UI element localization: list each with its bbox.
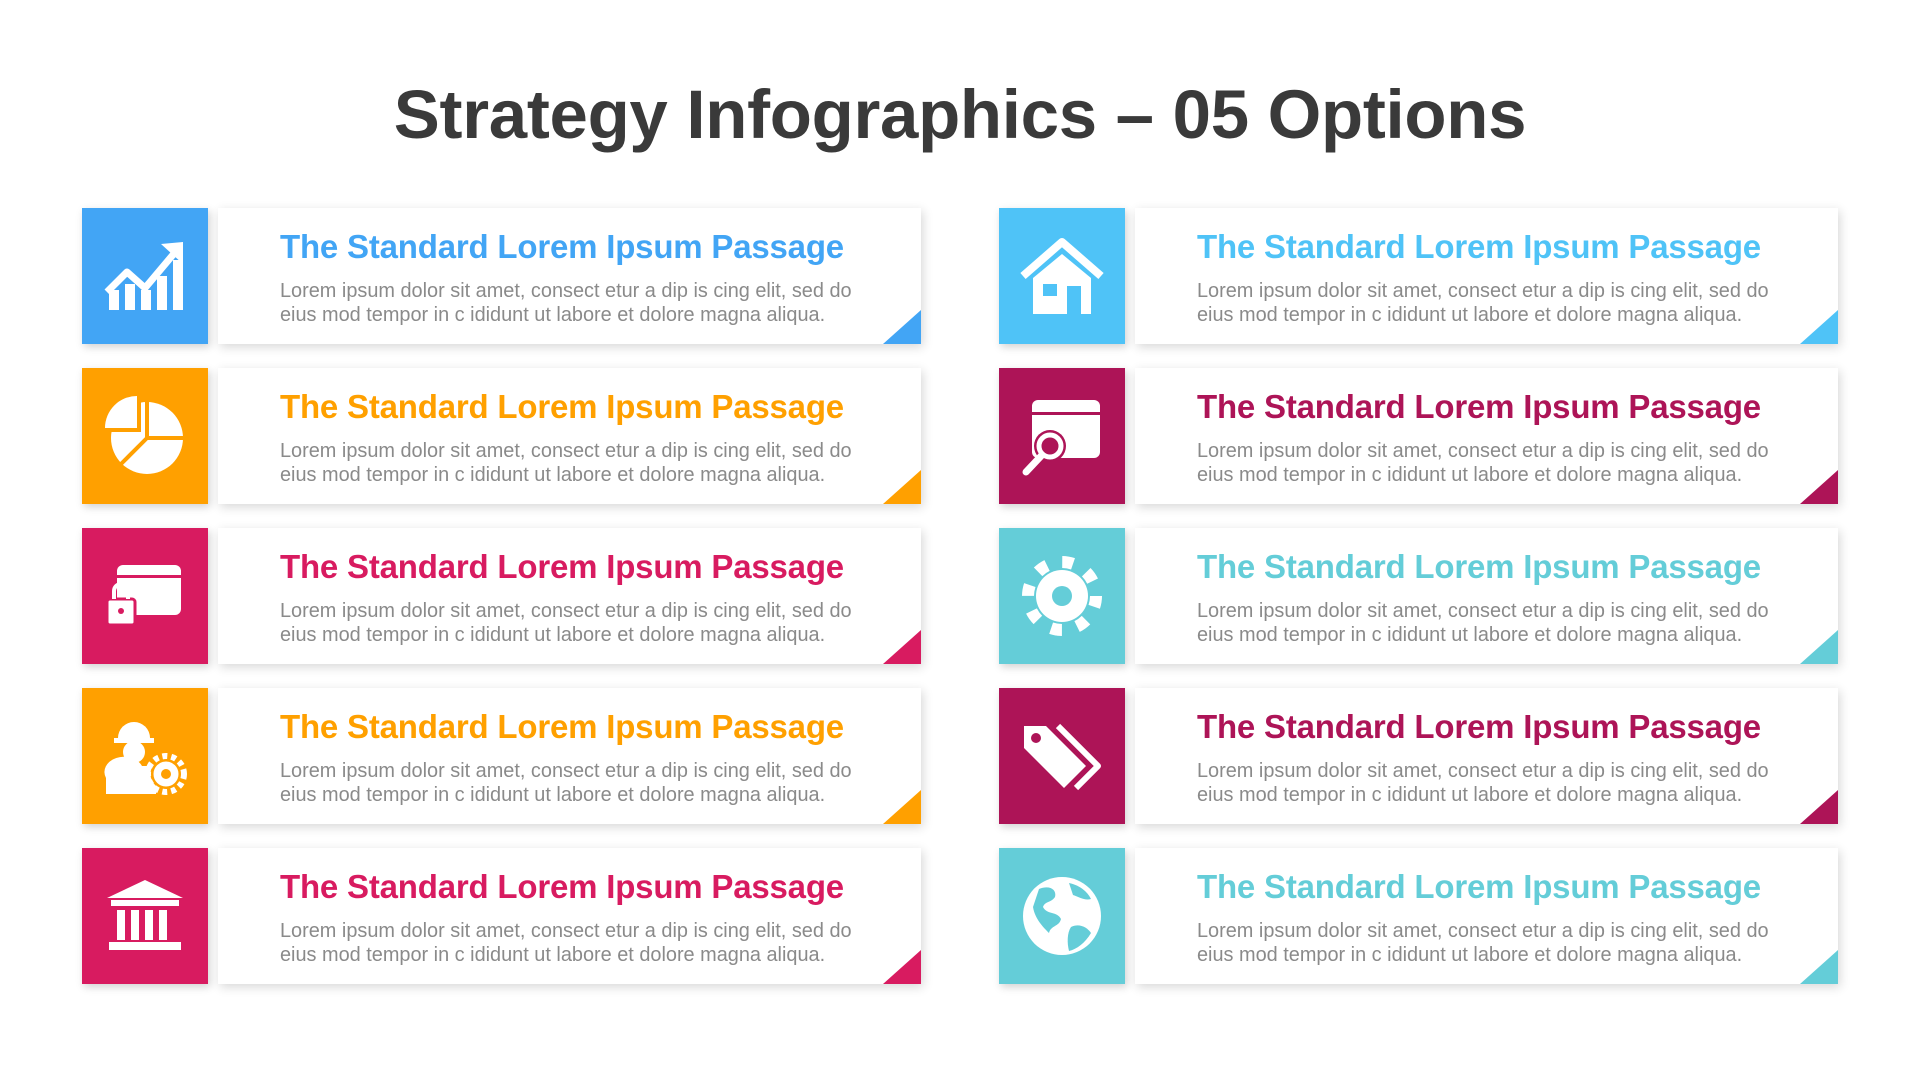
icon: pie chart bbox=[82, 368, 208, 504]
icon: house bbox=[999, 208, 1125, 344]
row: left 3 bbox=[80, 527, 927, 671]
icon: locked box bbox=[82, 528, 208, 664]
row: right 5 bbox=[998, 847, 1844, 991]
row: left 4 bbox=[80, 687, 927, 831]
card bbox=[1135, 848, 1838, 984]
card: The Standard Lorem Ipsum Passage bbox=[1197, 548, 1761, 585]
card bbox=[1135, 208, 1838, 344]
card: The Standard Lorem Ipsum Passage bbox=[280, 548, 844, 585]
card: The Standard Lorem Ipsum Passage bbox=[280, 228, 844, 265]
card: The Standard Lorem Ipsum Passage bbox=[1197, 388, 1761, 425]
card: The Standard Lorem Ipsum Passage bbox=[280, 388, 844, 425]
card: Lorem ipsum dolor sit amet, consect etur a dip is cing elit, sed do eius mod tempor in c ididunt ut labore et dolore magna aliqua. bbox=[280, 920, 852, 966]
row: right 2 bbox=[998, 367, 1844, 511]
icon: tags bbox=[999, 688, 1125, 824]
card: Lorem ipsum dolor sit amet, consect etur a dip is cing elit, sed do eius mod tempor in c ididunt ut labore et dolore magna aliqua. bbox=[280, 280, 852, 326]
row: left 1 bbox=[80, 207, 927, 351]
row: left 2 bbox=[80, 367, 927, 511]
card: The Standard Lorem Ipsum Passage bbox=[1197, 708, 1761, 745]
card bbox=[218, 528, 921, 664]
card bbox=[1135, 528, 1838, 664]
card: Lorem ipsum dolor sit amet, consect etur a dip is cing elit, sed do eius mod tempor in c ididunt ut labore et dolore magna aliqua. bbox=[1197, 440, 1769, 486]
title: Strategy Infographics – 05 Options bbox=[394, 76, 1526, 153]
card bbox=[1135, 368, 1838, 504]
icon: gear bbox=[999, 528, 1125, 664]
icon: bank bbox=[82, 848, 208, 984]
card: The Standard Lorem Ipsum Passage bbox=[1197, 868, 1761, 905]
card: Lorem ipsum dolor sit amet, consect etur a dip is cing elit, sed do eius mod tempor in c ididunt ut labore et dolore magna aliqua. bbox=[1197, 600, 1769, 646]
row: left 5 bbox=[80, 847, 927, 991]
card bbox=[218, 848, 921, 984]
card: Lorem ipsum dolor sit amet, consect etur a dip is cing elit, sed do eius mod tempor in c ididunt ut labore et dolore magna aliqua. bbox=[280, 600, 852, 646]
row: right 1 bbox=[998, 207, 1844, 351]
card: The Standard Lorem Ipsum Passage bbox=[1197, 228, 1761, 265]
row: right 4 bbox=[998, 687, 1844, 831]
icon: growth chart bbox=[82, 208, 208, 344]
card bbox=[218, 368, 921, 504]
card: The Standard Lorem Ipsum Passage bbox=[280, 868, 844, 905]
icon: worker with gear bbox=[82, 688, 208, 824]
card bbox=[1135, 688, 1838, 824]
card: Lorem ipsum dolor sit amet, consect etur a dip is cing elit, sed do eius mod tempor in c ididunt ut labore et dolore magna aliqua. bbox=[1197, 920, 1769, 966]
row: right 3 bbox=[998, 527, 1844, 671]
card: Lorem ipsum dolor sit amet, consect etur a dip is cing elit, sed do eius mod tempor in c ididunt ut labore et dolore magna aliqua. bbox=[280, 440, 852, 486]
card bbox=[218, 688, 921, 824]
card: The Standard Lorem Ipsum Passage bbox=[280, 708, 844, 745]
card bbox=[218, 208, 921, 344]
card: Lorem ipsum dolor sit amet, consect etur a dip is cing elit, sed do eius mod tempor in c ididunt ut labore et dolore magna aliqua. bbox=[280, 760, 852, 806]
icon: box search bbox=[999, 368, 1125, 504]
card: Lorem ipsum dolor sit amet, consect etur a dip is cing elit, sed do eius mod tempor in c ididunt ut labore et dolore magna aliqua. bbox=[1197, 280, 1769, 326]
card: Lorem ipsum dolor sit amet, consect etur a dip is cing elit, sed do eius mod tempor in c ididunt ut labore et dolore magna aliqua. bbox=[1197, 760, 1769, 806]
icon: globe bbox=[999, 848, 1125, 984]
